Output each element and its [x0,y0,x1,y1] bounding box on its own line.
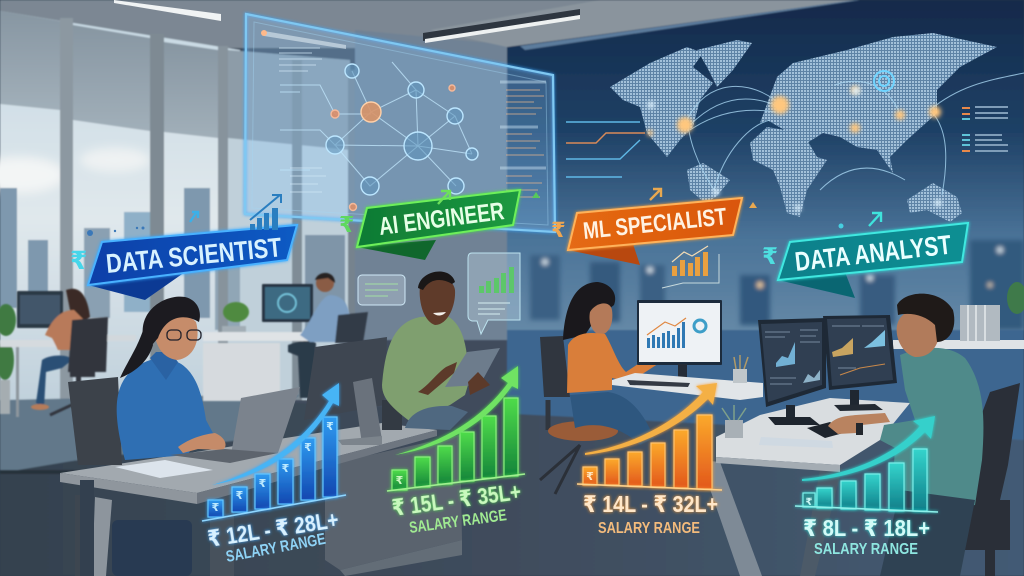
data analyst decorations [762,213,881,269]
AI engineer banner [357,190,520,260]
hair [563,282,615,340]
monitor white dashboard [637,300,722,378]
face [897,309,940,357]
salary text: ₹ 14L - ₹ 32L+ [583,491,718,517]
legs [880,490,975,576]
ML specialist salary chart [577,383,722,537]
face [420,277,455,325]
night city lights [530,240,1024,330]
salary text: ₹ 15L - ₹ 35L+ [390,478,523,521]
data scientist salary chart: SALARY RANGE [225,531,327,566]
AI engineer salary chart [387,366,525,537]
tablet on desk [759,437,833,448]
data scientist salary chart: ₹ [212,502,220,514]
data scientist salary chart: ₹ [236,490,244,502]
chair [960,383,1020,576]
ceiling lights [114,0,580,43]
keyboard [627,380,690,387]
AI engineer salary chart: SALARY RANGE [408,507,508,537]
data scientist banner: DATA SCIENTIST [105,232,283,279]
ML specialist salary chart: ₹ [586,471,594,483]
network nodes [326,64,478,210]
salary text: ₹ 12L - ₹ 28L+ [206,506,340,552]
drawer unit [325,435,462,576]
growth arrow [802,416,935,481]
data scientist banner [88,225,297,300]
background cabinet and desk [203,343,280,401]
AI engineer banner: AI ENGINEER [377,197,506,241]
monitor back left [17,291,63,328]
ML specialist banner: ML SPECIALIST [582,203,728,245]
chair [540,336,580,494]
arm [418,362,457,395]
desk back left [0,340,63,347]
background chair [50,317,108,415]
chair [68,377,192,576]
data analyst decorations: ₹ [762,243,778,269]
shelf with binders [893,282,1024,349]
growth arrow [395,366,518,455]
data scientist salary chart: ₹ [304,442,312,454]
ML specialist salary chart: SALARY RANGE [598,520,700,537]
main desk left [60,423,462,576]
data scientist salary chart: ₹ [282,463,290,475]
pencil pot front [722,405,746,438]
hair [418,272,455,290]
background chair man [335,312,368,343]
arm and hands [828,413,890,434]
background monitor [262,284,313,322]
lower wall band [507,330,1024,440]
torso [880,348,983,515]
background woman [31,289,90,410]
torso [117,358,214,460]
network links [280,62,472,186]
face [589,303,612,335]
chat bubble chart [468,253,520,334]
background man [288,273,351,398]
tablet [445,348,500,387]
data analyst salary chart [795,416,938,558]
person: data scientist [68,297,226,576]
floor [0,400,1024,576]
face [154,314,198,360]
holographic network panel [245,14,555,232]
distant skyline [0,188,345,335]
person: data analyst [807,294,1020,576]
plant left [0,304,16,380]
pencil pot back [733,355,748,383]
data scientist salary chart: ₹ [259,478,267,490]
growth arrow [212,383,339,485]
data scientist salary chart: ₹ [326,421,334,433]
data scientist salary chart [202,383,346,566]
jeans [570,392,654,445]
person: ML specialist [540,282,664,494]
map wall [507,0,1024,330]
desk right [700,398,910,576]
data analyst banner [778,223,968,298]
growth arrow [585,383,717,455]
data analyst salary chart: ₹ [806,497,813,508]
smile [433,312,446,316]
plant middle [223,302,249,322]
panel list text lines [279,48,546,197]
hands [178,433,226,453]
keyboard [807,422,847,438]
shirt [382,315,468,423]
glasses [167,330,201,340]
chair [382,400,402,430]
map legend lines [962,107,1008,151]
side wall [355,30,510,340]
ceiling [0,0,1024,48]
orange shirt [567,333,664,393]
AI engineer decorations [339,191,540,237]
laptop [170,387,300,463]
person: AI engineer [382,272,500,430]
window wall [0,11,358,470]
data scientist decorations [70,195,281,275]
map target ring [874,71,894,91]
AI engineer decorations: ₹ [339,212,354,237]
ponytail [120,320,153,378]
chat bubble small [358,275,405,305]
back desk right [612,373,763,400]
ML specialist decorations: ₹ [551,219,566,242]
AI engineer salary chart: ₹ [396,475,404,487]
monitor back [304,337,387,445]
ML specialist decorations [551,189,757,288]
data analyst salary chart: SALARY RANGE [814,541,918,558]
data scientist decorations: ₹ [70,247,87,275]
dual monitors [758,315,897,425]
ML specialist banner [568,198,742,265]
document on desk [115,460,213,478]
salary text: ₹ 8L - ₹ 18L+ [803,515,930,541]
hair [897,294,954,342]
hair [143,297,200,345]
world map [566,33,1024,222]
background desks and plants [0,273,368,417]
data analyst banner: DATA ANALYST [793,230,953,277]
